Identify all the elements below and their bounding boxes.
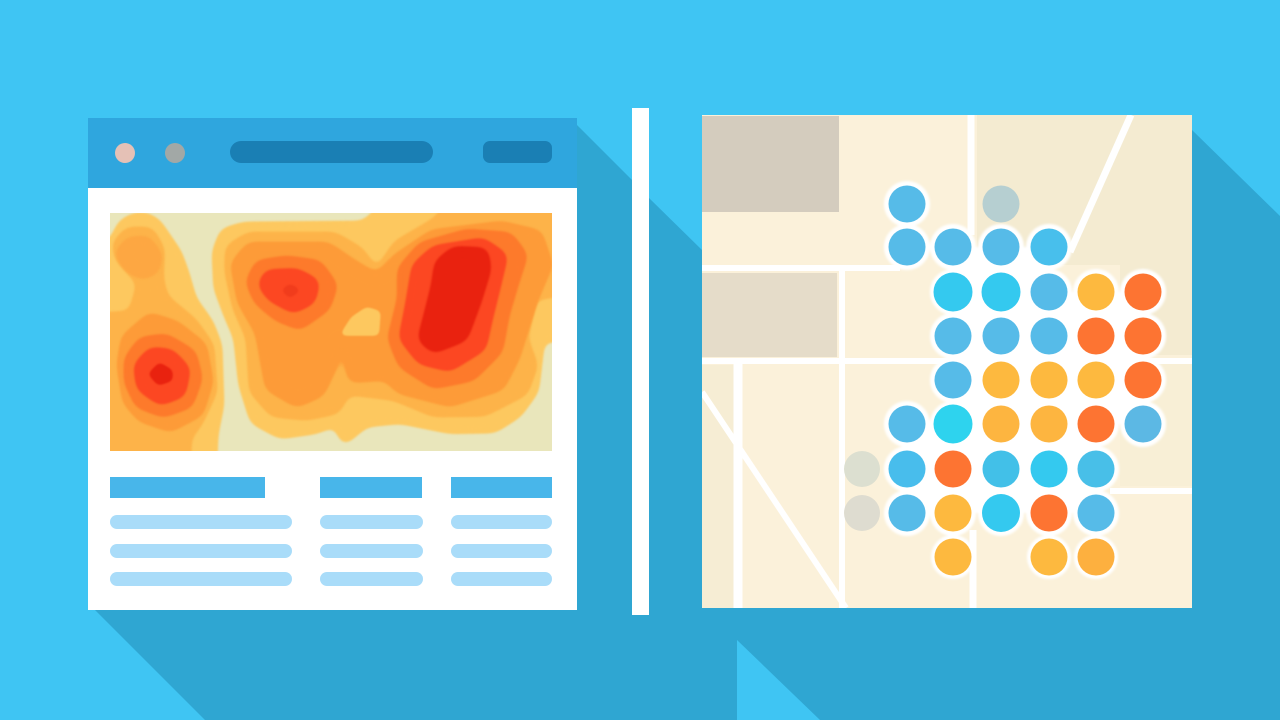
map base bbox=[702, 115, 1192, 608]
blue dots bbox=[888, 186, 1162, 532]
red contour band bbox=[135, 239, 507, 404]
panel: street map with dots bbox=[702, 115, 1192, 608]
heatmap bbox=[110, 213, 552, 451]
browser title bar bbox=[88, 118, 577, 188]
yellow dots bbox=[934, 274, 1114, 576]
illustration: heatmap and dot map comparison bbox=[88, 108, 1280, 720]
orange dots bbox=[934, 274, 1162, 532]
pale dots bbox=[844, 186, 1020, 531]
light orange contour band bbox=[110, 213, 552, 451]
cyan dots bbox=[934, 272, 1068, 532]
deep orange contour band bbox=[125, 230, 527, 416]
divider bbox=[632, 108, 649, 615]
long shadows bbox=[95, 125, 1280, 720]
orange contour band bbox=[115, 222, 552, 431]
panel: browser window with heatmap bbox=[80, 118, 587, 610]
window body bbox=[88, 187, 577, 610]
hot core bbox=[149, 248, 490, 385]
data table bbox=[110, 477, 552, 586]
map blocks bbox=[702, 115, 1192, 357]
gap in heatmap bbox=[341, 308, 380, 335]
dot halo bbox=[884, 181, 1166, 579]
map roads bbox=[702, 115, 1192, 608]
yellow contour band bbox=[110, 213, 552, 451]
